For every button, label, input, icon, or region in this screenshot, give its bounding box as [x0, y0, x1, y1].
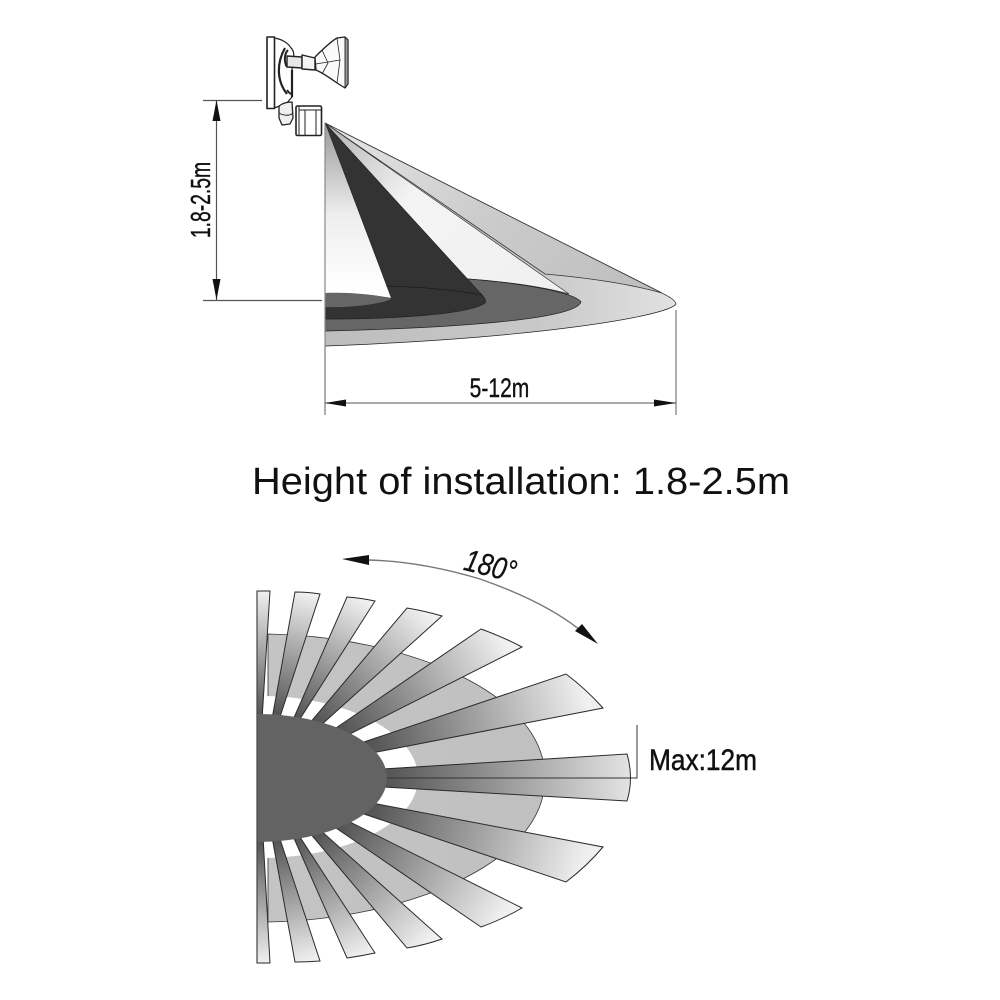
- dark cone and floor: [325, 123, 486, 319]
- title: Height of installation: 1.8-2.5m: [252, 461, 790, 503]
- callout: maximum range: [387, 725, 757, 778]
- outer floor: [325, 123, 676, 346]
- outer cone band: [325, 123, 662, 293]
- label: height range: 1.8-2.5m: [186, 162, 217, 238]
- dark floor back edge: [387, 286, 482, 295]
- inner floor: [325, 293, 391, 307]
- dimension: range 5-12m: [325, 310, 676, 415]
- label: angle: 180°: [461, 543, 520, 590]
- white inner cone: [325, 123, 391, 298]
- mid grey floor: [325, 275, 581, 331]
- light cone: [325, 123, 569, 294]
- label: range: 5-12m: [470, 374, 529, 404]
- icon: floodlight with motion sensor: [267, 37, 348, 136]
- label: max range: Max:12m: [649, 744, 757, 777]
- sensor centre: [257, 714, 387, 842]
- chart: side view of detection cones: [325, 123, 676, 346]
- grey zone disc: [268, 634, 545, 922]
- dimension: mounting height: [186, 100, 322, 300]
- chart: top view 180 degree detection fan: [257, 591, 630, 963]
- beams: [257, 591, 630, 963]
- arrow: 180 degree arc: [342, 543, 598, 644]
- white gap ring: [262, 696, 418, 858]
